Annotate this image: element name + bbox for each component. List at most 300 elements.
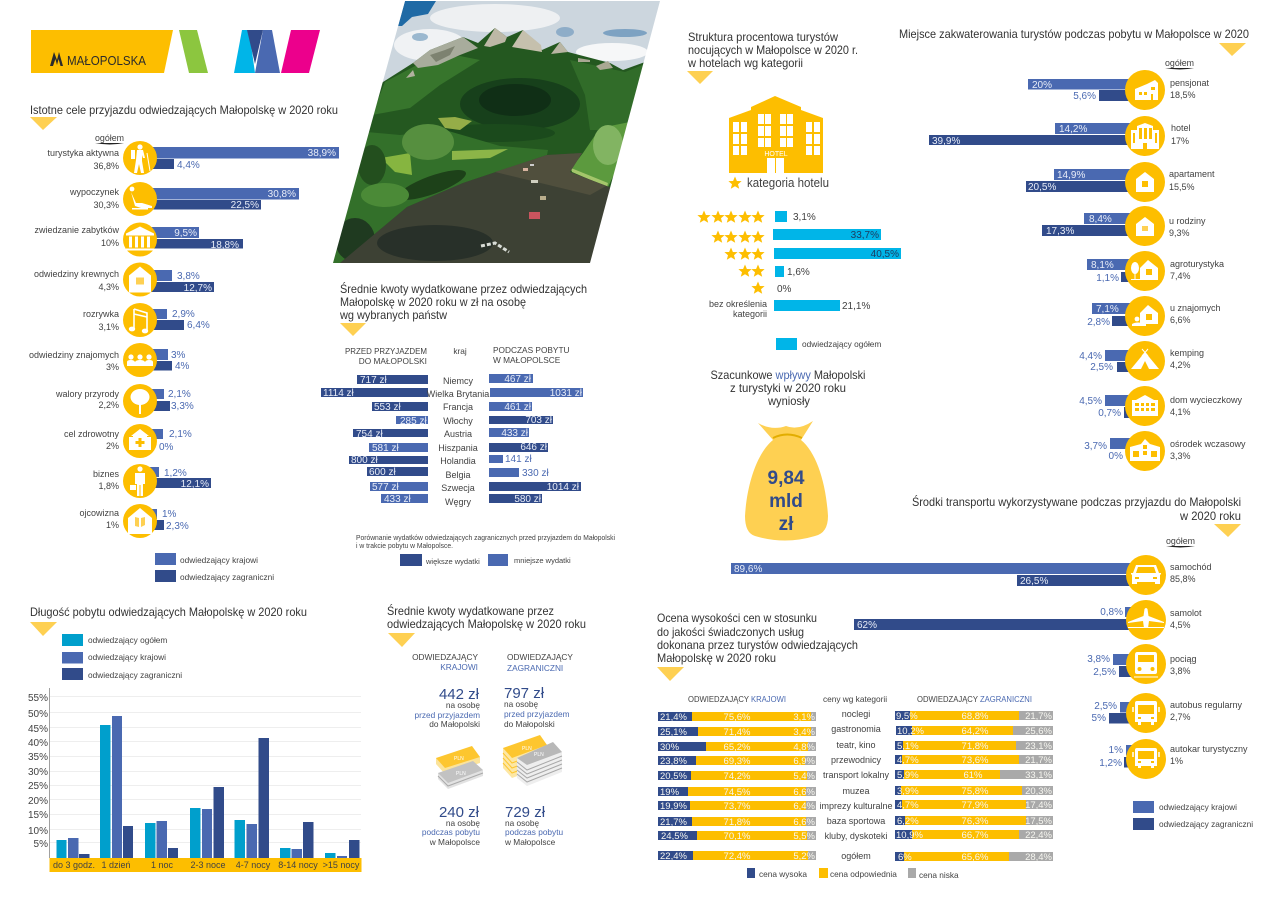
row: cel zdrowotny bbox=[64, 424, 192, 458]
legend: purposes of visit: odwiedzający zagraniczni bbox=[180, 572, 274, 582]
note: spending comparison: Porównanie wydatków odwiedzających zagranicznych przed przyjazdem do Małopolski bbox=[356, 533, 615, 542]
row: biznes: biznes bbox=[93, 469, 120, 479]
panel: tourism revenue bbox=[710, 368, 866, 540]
row: samolot: samolot bbox=[1170, 608, 1202, 618]
stacked bars: domestic visitors: 21,7% bbox=[660, 817, 687, 828]
stacked bars: foreign visitors: 23,1% bbox=[1025, 741, 1053, 752]
row: samolot: 4,5% bbox=[1170, 620, 1191, 630]
row: ojcowizna: 2,3% bbox=[166, 521, 189, 532]
diverging bars: spending before and during the stay: 141 zł bbox=[505, 454, 532, 465]
row: pociąg bbox=[1087, 644, 1197, 684]
category labels: imprezy kulturalne bbox=[819, 801, 893, 811]
heading: price ratings bbox=[657, 611, 858, 665]
bar chart: length of stay: 4-7 nocy bbox=[236, 860, 271, 870]
row: biznes: 12,1% bbox=[181, 479, 209, 490]
row: pensjonat: pensjonat bbox=[1170, 78, 1210, 88]
row: dom wycieczkowy: 0,7% bbox=[1098, 408, 1121, 419]
heading: tourism revenue bbox=[710, 368, 866, 408]
legend: price ratings: cena niska bbox=[919, 870, 959, 880]
diverging bars: spending before and during the stay: 553 zł bbox=[374, 402, 401, 413]
column: foreign visitors bbox=[504, 652, 573, 847]
icon: small banknote stacks: PLN bbox=[454, 756, 464, 762]
heading: price ratings: Małopolskę w 2020 roku bbox=[657, 651, 776, 665]
row: wypoczynek: 30,8% bbox=[268, 189, 296, 200]
diverging bars: spending before and during the stay: 285 zł bbox=[400, 416, 427, 427]
bar chart: length of stay: 35% bbox=[28, 752, 48, 763]
column: domestic visitors: na osobę bbox=[446, 818, 480, 828]
row: autobus regularny bbox=[1092, 693, 1243, 733]
row: autokar turystyczny: 1,2% bbox=[1099, 758, 1122, 769]
bar chart: hotel categories: 0% bbox=[777, 284, 792, 295]
column headers: PRZED PRZYJAZDEM bbox=[345, 346, 427, 356]
row: apartament: 15,5% bbox=[1169, 182, 1195, 192]
row: turystyka aktywna bbox=[47, 141, 339, 175]
column: domestic visitors: KRAJOWI bbox=[440, 662, 478, 672]
stacked bars: domestic visitors: 23,8% bbox=[660, 756, 687, 767]
stacked bars: domestic visitors: 69,3% bbox=[724, 756, 751, 767]
stacked bars: foreign visitors: 6,2% bbox=[897, 816, 919, 827]
icon: hotel building: HOTEL bbox=[764, 151, 788, 158]
heading: hotel categories: Struktura procentowa turystów bbox=[688, 30, 838, 44]
row: u znajomych bbox=[1087, 296, 1221, 336]
row: ojcowizna bbox=[79, 504, 189, 538]
legend: hotel categories bbox=[776, 338, 881, 350]
diverging bars: spending before and during the stay: 717 zł bbox=[360, 375, 387, 386]
bar chart: length of stay: 40% bbox=[28, 738, 48, 749]
row: kemping: 4,4% bbox=[1079, 351, 1102, 362]
row: pociąg: pociąg bbox=[1170, 654, 1197, 664]
stacked bars: foreign visitors: 33,1% bbox=[1025, 770, 1053, 781]
legend: spending: mniejsze wydatki bbox=[514, 556, 571, 565]
icon: money bag with total: 9,84 bbox=[768, 468, 805, 489]
column: domestic visitors: podczas pobytu bbox=[422, 827, 480, 837]
legend: purposes of visit: odwiedzający krajowi bbox=[180, 555, 258, 565]
legend: price ratings bbox=[747, 868, 959, 880]
stacked bars: foreign visitors: 5,1% bbox=[897, 741, 919, 752]
stacked bars: domestic visitors: 4,8% bbox=[793, 742, 816, 753]
stacked bars: foreign visitors: 77,9% bbox=[962, 800, 989, 811]
legend: length of stay: odwiedzający krajowi bbox=[88, 652, 166, 662]
bar chart: length of stay: 10% bbox=[28, 826, 48, 837]
row: cel zdrowotny: 2% bbox=[106, 441, 119, 451]
category labels: teatr, kino bbox=[836, 740, 876, 750]
category labels bbox=[819, 709, 893, 861]
row: turystyka aktywna: 36,8% bbox=[93, 161, 119, 171]
row: pociąg: 3,8% bbox=[1170, 666, 1191, 676]
bar chart: length of stay: 20% bbox=[28, 796, 48, 807]
row: u znajomych: u znajomych bbox=[1170, 303, 1221, 313]
row: autobus regularny: autobus regularny bbox=[1170, 700, 1243, 710]
row: odwiedziny krewnych: odwiedziny krewnych bbox=[34, 269, 119, 279]
heading pointer bbox=[30, 622, 57, 636]
row: samochód: 85,8% bbox=[1170, 574, 1196, 584]
row: walory przyrody: 2,2% bbox=[98, 400, 119, 410]
ogółem column label: ogółem bbox=[95, 133, 124, 143]
row: rozrywka: 2,9% bbox=[172, 309, 195, 320]
category labels: transport lokalny bbox=[823, 770, 890, 780]
stacked bars: foreign visitors: 25,6% bbox=[1025, 726, 1053, 737]
diverging bars: spending before and during the stay: Holandia bbox=[440, 456, 476, 466]
stacked bars: foreign visitors: 28,4% bbox=[1025, 852, 1053, 863]
heading pointer bbox=[1214, 524, 1241, 537]
row: autobus regularny: 2,7% bbox=[1170, 712, 1191, 722]
stacked bars: foreign visitors: 75,8% bbox=[962, 786, 989, 797]
heading: hotel categories: w hotelach wg kategorii bbox=[687, 56, 803, 70]
diverging bars: spending before and during the stay: 800 zł bbox=[351, 455, 378, 466]
legend: spending bbox=[400, 554, 571, 566]
row: wypoczynek: 22,5% bbox=[231, 200, 259, 211]
diverging bars: spending before and during the stay: Belgia bbox=[445, 470, 471, 480]
column headers: kraj bbox=[453, 346, 467, 356]
note: spending comparison: i w trakcie pobytu w Małopolsce. bbox=[356, 541, 453, 550]
row: u znajomych: 2,8% bbox=[1087, 317, 1110, 328]
heading: average spending: odwiedzających Małopolskę w 2020 roku bbox=[387, 617, 586, 631]
diverging bars: spending before and during the stay: 330 zł bbox=[522, 468, 549, 479]
column: domestic visitors: ODWIEDZAJĄCY bbox=[412, 652, 478, 662]
icon: hotel building bbox=[729, 96, 823, 173]
stacked bars: foreign visitors: 68,8% bbox=[962, 711, 989, 722]
heading: spending by country: Małopolskę w 2020 roku w zł na osobę bbox=[340, 295, 526, 309]
row: autokar turystyczny bbox=[1099, 739, 1248, 779]
stacked bars: foreign visitors: 17,4% bbox=[1025, 800, 1053, 811]
ogółem column label: ogółem bbox=[1166, 536, 1195, 546]
row: odwiedziny znajomych: odwiedziny znajomych bbox=[29, 350, 119, 360]
row: ośrodek wczasowy: 3,3% bbox=[1170, 451, 1191, 461]
column: domestic visitors: do Małopolski bbox=[429, 719, 480, 729]
diverging bars: spending before and during the stay: Hiszpania bbox=[438, 443, 478, 453]
row: agroturystyka: 8,1% bbox=[1091, 260, 1114, 271]
column: foreign visitors: 729 zł bbox=[505, 804, 546, 821]
stacked bars: domestic visitors: 3,1% bbox=[793, 712, 816, 723]
legend: length of stay: odwiedzający zagraniczni bbox=[88, 670, 182, 680]
row: samolot: 0,8% bbox=[1100, 607, 1123, 618]
row: odwiedziny krewnych: 12,7% bbox=[184, 283, 212, 294]
row: u rodziny: 9,3% bbox=[1169, 228, 1190, 238]
diverging bars: spending before and during the stay bbox=[321, 374, 583, 507]
stacked bars: foreign visitors: 6% bbox=[898, 852, 912, 863]
heading: hotel categories bbox=[687, 30, 858, 70]
column: foreign visitors: 797 zł bbox=[504, 685, 545, 702]
column headers bbox=[345, 345, 570, 366]
row: u rodziny: 17,3% bbox=[1046, 226, 1074, 237]
diverging bars: spending before and during the stay: 754 zł bbox=[356, 429, 383, 440]
stacked bars: domestic visitors: 3,4% bbox=[793, 727, 816, 738]
bar chart: length of stay: 30% bbox=[28, 767, 48, 778]
diverging bars: spending before and during the stay: 433 zł bbox=[384, 494, 411, 505]
stacked bars: foreign visitors: 4,7% bbox=[897, 800, 919, 811]
bar chart: length of stay: 55% bbox=[28, 693, 48, 704]
column: foreign visitors: w Małopolsce bbox=[504, 837, 556, 847]
row: hotel: 39,9% bbox=[932, 136, 960, 147]
column headers: ceny wg kategorii bbox=[823, 694, 887, 704]
column headers: ODWIEDZAJĄCY ZAGRANICZNI bbox=[917, 694, 1032, 704]
photo: Pieniny mountains and Dunajec river bbox=[331, 0, 664, 266]
diverging bars: spending before and during the stay: 581 zł bbox=[372, 443, 399, 454]
stacked bars: domestic visitors: 24,5% bbox=[661, 831, 688, 842]
heading pointer bbox=[1219, 43, 1246, 56]
column: foreign visitors: do Małopolski bbox=[504, 719, 555, 729]
category labels: kluby, dyskoteki bbox=[825, 831, 887, 841]
column headers: DO MAŁOPOLSKI bbox=[359, 356, 427, 366]
heading: hotel categories: nocujących w Małopolsce w 2020 r. bbox=[688, 43, 858, 57]
row: apartament: 20,5% bbox=[1028, 182, 1056, 193]
row: zwiedzanie zabytków: 9,5% bbox=[174, 228, 197, 239]
diverging bars: spending before and during the stay: Wielka Brytania bbox=[427, 389, 489, 399]
stacked bars: foreign visitors bbox=[895, 711, 1053, 863]
category labels: muzea bbox=[842, 786, 870, 796]
row: dom wycieczkowy: 4,1% bbox=[1170, 407, 1191, 417]
row: zwiedzanie zabytków bbox=[34, 222, 243, 256]
stacked bars: foreign visitors: 71,8% bbox=[962, 741, 989, 752]
row: samochód: 89,6% bbox=[734, 564, 762, 575]
row: odwiedziny znajomych: 4% bbox=[175, 361, 190, 372]
diverging bars: spending before and during the stay: Szwecja bbox=[441, 483, 475, 493]
row: dom wycieczkowy: 4,5% bbox=[1079, 396, 1102, 407]
stacked bars: domestic visitors: 6,6% bbox=[793, 817, 816, 828]
diverging bars: spending before and during the stay: Węgry bbox=[445, 497, 471, 507]
heading: purposes of visit: Istotne cele przyjazdu odwiedzających Małopolskę w 2020 roku bbox=[30, 103, 338, 117]
row: samolot bbox=[854, 600, 1202, 640]
column headers: ODWIEDZAJĄCY KRAJOWI bbox=[688, 694, 786, 704]
column: foreign visitors: przed przyjazdem bbox=[504, 709, 570, 719]
diverging bars: spending before and during the stay: 461 zł bbox=[504, 402, 532, 413]
heading: accommodation: Miejsce zakwaterowania turystów podczas pobytu w Małopolsce w 2020 bbox=[899, 27, 1249, 41]
diverging bars: spending before and during the stay: 1114 zł bbox=[323, 388, 355, 399]
category labels: baza sportowa bbox=[827, 816, 885, 826]
legend: length of stay bbox=[62, 634, 182, 680]
panel: spending by country bbox=[321, 281, 615, 566]
bar chart: length of stay: 2-3 noce bbox=[190, 860, 226, 870]
bar chart: length of stay: 5% bbox=[34, 839, 48, 850]
label: hotel category: kategoria hotelu bbox=[747, 176, 829, 190]
stacked bars: domestic visitors: 73,7% bbox=[724, 801, 751, 812]
stacked bars: domestic visitors: 71,4% bbox=[724, 727, 751, 738]
icon: large banknote stacks: PLN bbox=[534, 752, 544, 758]
heading: price ratings: do jakości świadczonych usług bbox=[657, 625, 804, 639]
logo: Małopolska bbox=[31, 30, 320, 73]
bar chart: length of stay: >15 nocy bbox=[323, 860, 360, 870]
heading pointer bbox=[30, 117, 57, 130]
bar chart: hotel categories: 33,7% bbox=[851, 230, 879, 241]
row: rozrywka: 6,4% bbox=[187, 320, 210, 331]
category labels: gastronomia bbox=[831, 724, 881, 734]
row: odwiedziny znajomych: 3% bbox=[171, 350, 186, 361]
row: agroturystyka: 1,1% bbox=[1096, 273, 1119, 284]
heading: means of transport bbox=[912, 494, 1241, 523]
row: pensjonat bbox=[1028, 70, 1210, 110]
row: walory przyrody: walory przyrody bbox=[55, 389, 119, 399]
row: pensjonat: 18,5% bbox=[1170, 90, 1196, 100]
row: agroturystyka: 7,4% bbox=[1170, 271, 1191, 281]
note: spending comparison bbox=[356, 533, 615, 550]
row: agroturystyka bbox=[1087, 251, 1224, 291]
heading pointer bbox=[340, 323, 366, 336]
stacked bars: domestic visitors: 74,2% bbox=[724, 771, 751, 782]
bar chart: length of stay: do 3 godz. bbox=[53, 860, 95, 870]
icon: large banknote stacks: PLN bbox=[522, 746, 532, 752]
diverging bars: spending before and during the stay: 703 zł bbox=[525, 415, 553, 426]
row: samochód: 26,5% bbox=[1020, 576, 1048, 587]
legend: length of stay: odwiedzający ogółem bbox=[88, 635, 167, 645]
logo: Małopolska: MAŁOPOLSKA bbox=[67, 53, 146, 68]
stacked bars: domestic visitors: 5,4% bbox=[793, 771, 816, 782]
stacked bars: foreign visitors: 64,2% bbox=[962, 726, 989, 737]
column: domestic visitors: 442 zł bbox=[439, 686, 480, 703]
row: odwiedziny krewnych: 3,8% bbox=[177, 271, 200, 282]
bar chart: length of stay: 25% bbox=[28, 781, 48, 792]
row: odwiedziny znajomych bbox=[29, 343, 190, 377]
panel: purposes of visit bbox=[29, 103, 339, 582]
row: odwiedziny znajomych: 3% bbox=[106, 362, 119, 372]
row: u znajomych: 6,6% bbox=[1170, 315, 1191, 325]
row: biznes bbox=[93, 464, 211, 498]
diverging bars: spending before and during the stay: 577 zł bbox=[372, 482, 399, 493]
stacked bars: domestic visitors: 5,5% bbox=[793, 831, 816, 842]
stacked bars: domestic visitors: 5,2% bbox=[793, 851, 816, 862]
row: ośrodek wczasowy: 0% bbox=[1109, 451, 1123, 462]
category labels: noclegi bbox=[842, 709, 870, 719]
stacked bars: domestic visitors: 30% bbox=[660, 742, 680, 753]
heading: price ratings: dokonana przez turystów odwiedzających bbox=[657, 638, 858, 652]
row: u rodziny: 8,4% bbox=[1089, 214, 1112, 225]
row: autobus regularny: 2,5% bbox=[1094, 701, 1117, 712]
bar chart: length of stay bbox=[28, 688, 362, 872]
stacked bars: foreign visitors: 17,5% bbox=[1025, 816, 1053, 827]
row: dom wycieczkowy bbox=[1079, 386, 1243, 426]
stacked bars: domestic visitors: 6,9% bbox=[793, 756, 816, 767]
row: samochód bbox=[731, 555, 1212, 595]
stacked bars: domestic visitors: 19,9% bbox=[660, 801, 687, 812]
row: ojcowizna: ojcowizna bbox=[79, 508, 119, 518]
bar chart: hotel categories: bez określenia bbox=[709, 299, 767, 309]
column: foreign visitors: ZAGRANICZNI bbox=[507, 663, 563, 673]
column: foreign visitors: ODWIEDZAJĄCY bbox=[507, 652, 573, 662]
stacked bars: domestic visitors: 72,4% bbox=[724, 851, 751, 862]
stacked bars: foreign visitors: 65,6% bbox=[962, 852, 989, 863]
row: rozrywka: 3,1% bbox=[98, 322, 119, 332]
icon: money bag with total bbox=[745, 421, 828, 540]
icon: money bag with total: zł bbox=[779, 514, 794, 535]
row: kemping bbox=[1079, 341, 1204, 381]
heading: spending by country bbox=[339, 281, 587, 322]
legend: means of transport bbox=[1133, 801, 1253, 830]
stacked bars: foreign visitors: 22,4% bbox=[1025, 830, 1053, 841]
row: biznes: 1,2% bbox=[164, 468, 187, 479]
icon: small banknote stacks: PLN bbox=[456, 771, 466, 777]
category labels: ogółem bbox=[841, 851, 871, 861]
diverging bars: spending before and during the stay: 580 zł bbox=[514, 494, 542, 505]
heading: means of transport: Środki transportu wykorzystywane podczas przyjazdu do Małopolski bbox=[912, 494, 1241, 509]
stacked bars: foreign visitors: 5,9% bbox=[897, 770, 919, 781]
row: walory przyrody: 2,1% bbox=[168, 389, 191, 400]
row: odwiedziny krewnych: 4,3% bbox=[98, 282, 119, 292]
diverging bars: spending before and during the stay: 600 zł bbox=[369, 467, 396, 478]
stacked bars: domestic visitors: 21,4% bbox=[660, 712, 687, 723]
row: apartament bbox=[1026, 162, 1215, 202]
column headers: W MAŁOPOLSCE bbox=[493, 355, 561, 365]
row: u rodziny: u rodziny bbox=[1169, 216, 1206, 226]
diverging bars: spending before and during the stay: Francja bbox=[443, 402, 473, 412]
row: zwiedzanie zabytków: 18,8% bbox=[211, 240, 239, 251]
panel: length of stay bbox=[28, 605, 362, 872]
column: domestic visitors: na osobę bbox=[446, 700, 480, 710]
diverging bars: spending before and during the stay: 433 zł bbox=[501, 428, 529, 439]
row: ojcowizna: 1% bbox=[162, 509, 177, 520]
row: hotel bbox=[929, 116, 1191, 156]
stacked bars: foreign visitors: 76,3% bbox=[962, 816, 989, 827]
stacked bars: foreign visitors: 10,2% bbox=[897, 726, 924, 737]
row: cel zdrowotny: cel zdrowotny bbox=[64, 429, 119, 439]
icon: small banknote stacks bbox=[436, 746, 483, 789]
row: rozrywka bbox=[83, 303, 210, 337]
row: apartament: 14,9% bbox=[1057, 170, 1085, 181]
stacked bars: domestic visitors: 65,2% bbox=[724, 742, 751, 753]
row: turystyka aktywna: turystyka aktywna bbox=[47, 148, 119, 158]
column: foreign visitors: podczas pobytu bbox=[505, 827, 564, 837]
diverging bars: spending before and during the stay: 467 zł bbox=[504, 374, 532, 385]
stacked bars: foreign visitors: 21,7% bbox=[1025, 711, 1053, 722]
stacked bars: domestic visitors: 20,5% bbox=[660, 771, 687, 782]
row: kemping: kemping bbox=[1170, 348, 1204, 358]
heading: tourism revenue: Szacunkowe wpływy Małopolski bbox=[710, 368, 866, 382]
row: cel zdrowotny: 2,1% bbox=[169, 429, 192, 440]
row: turystyka aktywna: 38,9% bbox=[308, 148, 336, 159]
stacked bars: domestic visitors: 6,4% bbox=[793, 801, 816, 812]
bar chart: length of stay: 50% bbox=[28, 709, 48, 720]
panel: hotel categories bbox=[687, 30, 901, 350]
diverging bars: spending before and during the stay: 1031 zł bbox=[550, 388, 583, 399]
heading: average spending: Średnie kwoty wydatkowane przez bbox=[387, 603, 554, 618]
row: walory przyrody: 3,3% bbox=[171, 401, 194, 412]
row: wypoczynek: wypoczynek bbox=[69, 187, 119, 197]
row: samochód: samochód bbox=[1170, 562, 1212, 572]
heading: length of stay: Długość pobytu odwiedzających Małopolskę w 2020 roku bbox=[30, 605, 307, 619]
row: dom wycieczkowy: dom wycieczkowy bbox=[1170, 395, 1243, 405]
row: apartament: apartament bbox=[1169, 169, 1215, 179]
row: pensjonat: 20% bbox=[1032, 80, 1052, 91]
panel: accommodation bbox=[899, 27, 1249, 471]
stacked bars: foreign visitors: 66,7% bbox=[962, 830, 989, 841]
stacked bars: foreign visitors: 4,7% bbox=[897, 755, 919, 766]
row: samolot: 62% bbox=[857, 620, 877, 631]
panel: price ratings bbox=[657, 611, 1053, 880]
row: autobus regularny: 5% bbox=[1092, 713, 1106, 724]
icon: large banknote stacks bbox=[503, 735, 562, 786]
bar chart: length of stay: 15% bbox=[28, 810, 48, 821]
bar chart: length of stay: 8-14 nocy bbox=[278, 860, 318, 870]
row: rozrywka: rozrywka bbox=[83, 309, 119, 319]
diverging bars: spending before and during the stay: Niemcy bbox=[443, 376, 473, 386]
legend: price ratings: cena odpowiednia bbox=[830, 869, 897, 879]
icon: money bag with total: mld bbox=[769, 491, 803, 512]
row: ojcowizna: 1% bbox=[106, 520, 119, 530]
column: domestic visitors: przed przyjazdem bbox=[415, 710, 480, 720]
stacked bars: foreign visitors: 9,5% bbox=[896, 711, 918, 722]
stacked bars: foreign visitors: 10,9% bbox=[896, 830, 923, 841]
column headers: PODCZAS POBYTU bbox=[493, 345, 570, 355]
heading pointer bbox=[657, 667, 684, 681]
legend: spending: większe wydatki bbox=[425, 557, 480, 566]
diverging bars: spending before and during the stay: 1014 zł bbox=[547, 482, 580, 493]
legend: means of transport: odwiedzający krajowi bbox=[1159, 802, 1237, 812]
row: autokar turystyczny: 1% bbox=[1170, 756, 1183, 766]
legend: price ratings: cena wysoka bbox=[759, 869, 807, 879]
row: ośrodek wczasowy bbox=[1084, 431, 1246, 471]
row: u rodziny bbox=[1042, 206, 1206, 246]
legend: means of transport: odwiedzający zagraniczni bbox=[1159, 819, 1253, 829]
category labels: przewodnicy bbox=[831, 755, 882, 765]
legend: purposes of visit bbox=[155, 553, 274, 582]
